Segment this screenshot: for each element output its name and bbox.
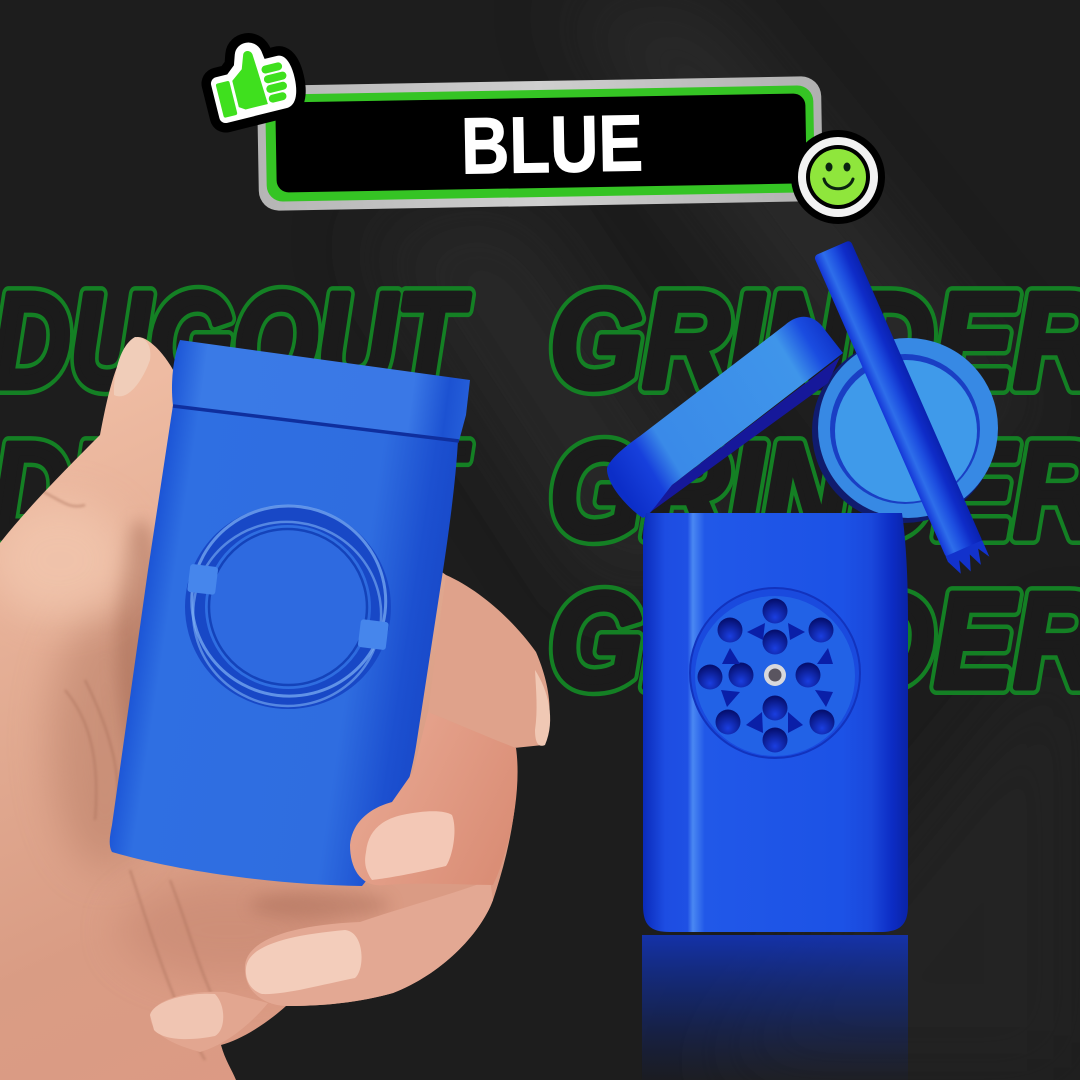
- ring emboss: [175, 494, 402, 718]
- lid seam: [173, 406, 459, 441]
- second finger: [245, 880, 493, 1006]
- tool stick: [814, 240, 992, 578]
- held container: [110, 340, 470, 886]
- held container lid: [172, 340, 470, 441]
- fingers over container: [150, 712, 518, 1052]
- background lettering: DUGOUT GRINDER: [0, 265, 1080, 716]
- grinding chamber: [690, 588, 860, 758]
- thumb nail: [114, 337, 150, 396]
- index finger nail: [535, 670, 550, 746]
- little finger nail: [150, 994, 223, 1039]
- hand holding container: [0, 337, 550, 1080]
- inner disc: [200, 520, 376, 694]
- banner silver frame: [257, 76, 823, 211]
- smiley mouth: [824, 179, 853, 189]
- index finger behind container: [428, 575, 550, 748]
- grinder teeth: [721, 623, 833, 733]
- icon: smiley face: [791, 130, 885, 224]
- DUGOUT row 1: DUGOUT: [0, 265, 470, 416]
- icon: thumbs up: [209, 41, 294, 118]
- ring notches: [187, 564, 218, 595]
- main container body: [643, 513, 908, 932]
- main front finger: [350, 712, 518, 885]
- DUGOUT row 1: DUGOUT: [0, 265, 470, 416]
- center screw: [764, 664, 786, 686]
- title banner: [257, 76, 823, 211]
- stick pointed teeth: [946, 540, 992, 578]
- palm and thumb: [0, 337, 517, 1080]
- banner green frame: [265, 85, 815, 202]
- banner title: BLUE: [460, 98, 644, 191]
- lid underside: [645, 357, 840, 518]
- second finger nail: [246, 930, 362, 994]
- thumb white outline: [211, 41, 293, 117]
- main front finger nail: [365, 811, 454, 880]
- palm shading: [0, 490, 390, 1060]
- banner black panel: [275, 93, 807, 193]
- round disc lid: [812, 338, 998, 523]
- reflection below grinder: [642, 935, 908, 1080]
- smiley eyes: [826, 162, 850, 172]
- outer ring: [184, 504, 392, 710]
- thumb green hand: [210, 43, 293, 118]
- DUGOUT row 2: DUGOUT: [0, 415, 470, 566]
- grinder holes: [698, 598, 834, 752]
- little finger: [150, 992, 268, 1052]
- DUGOUT row 2: DUGOUT: [0, 415, 470, 566]
- hinged rectangular lid: [607, 317, 843, 518]
- lid top face: [607, 317, 843, 518]
- held container body: [110, 405, 458, 886]
- thumb black outline: [211, 41, 293, 117]
- open grinder product: [607, 240, 998, 1080]
